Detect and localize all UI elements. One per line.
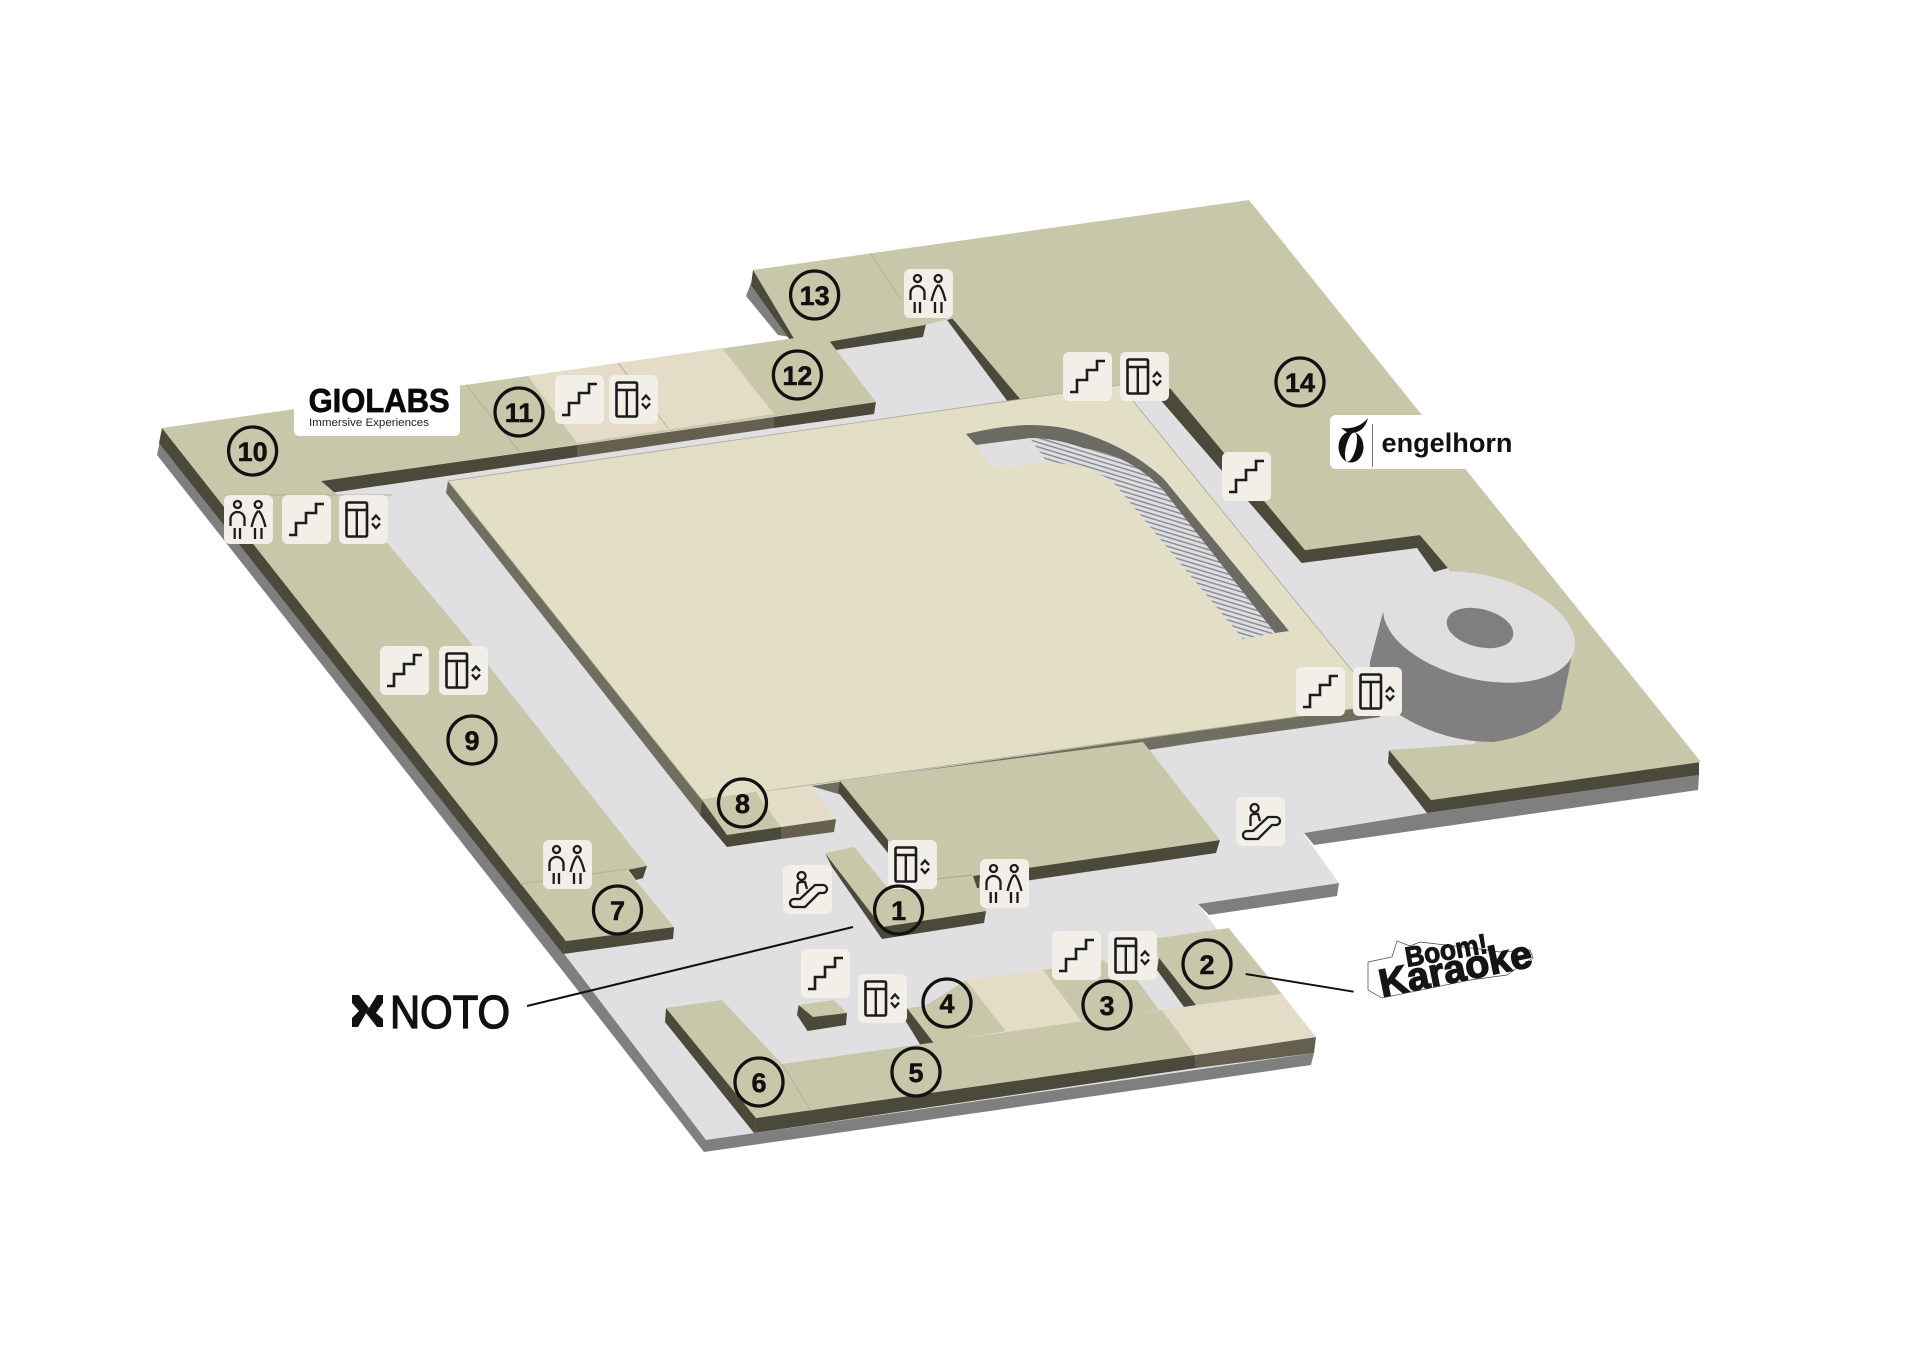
logo: Boom! Karaoke: Karaoke [1375,933,1536,1006]
icon: stairs, unit 11 [555,375,604,424]
marker 8: 8 [735,789,750,819]
marker 13: 13 [800,281,830,311]
icon: toilets, unit 13 [904,269,953,318]
icon: stairs, unit 10 [282,495,331,544]
icon: toilets, unit 1 [980,859,1029,908]
callout: XNOTO leader line [527,927,853,1006]
central atrium floor [446,385,1380,815]
numbered unit markers [229,271,1324,1106]
marker 1: 1 [891,896,906,926]
atrium opening: stairs [1030,438,1275,639]
units 5 and 6 row [665,994,1316,1133]
marker 2: 2 [1199,950,1215,980]
marker 14 [1276,358,1324,406]
marker 11: 11 [505,398,533,428]
marker 10 [229,427,277,475]
corridor floor [162,300,1600,1140]
logo: GIOLABS [294,382,460,436]
marker 4: 4 [939,989,955,1019]
marker 3 [1083,981,1131,1029]
marker 6: 6 [751,1068,767,1098]
icon: lift, unit 4 [858,974,907,1023]
icon: lift, unit 1 [888,840,937,889]
marker 4 [923,979,971,1027]
marker 1 [875,886,923,934]
icon: lift, atrium top [1120,352,1169,401]
marker 9 [448,716,496,764]
icon: stairs, service block [801,949,850,998]
icon: stairs, unit 3 [1052,931,1101,980]
icon: lift, unit 11 [609,375,658,424]
logo: Boom! Karaoke: Boom! [1403,928,1490,973]
icon: toilets, unit 7 [543,840,592,889]
facility icons [224,269,1402,1023]
icon: toilets, unit 10 [224,495,273,544]
unit 8 block [700,786,836,847]
icon: stairs, atrium top [1063,352,1112,401]
logo: engelhorn [1330,415,1520,469]
icon: stairs, atrium right [1296,667,1345,716]
building base: grey outer side walls [157,283,1699,1152]
marker 6 [735,1058,783,1106]
marker 7: 7 [610,896,625,926]
marker 3: 3 [1099,991,1115,1021]
marker 13 [791,271,839,319]
logo: GIOLABS: Immersive Experiences [309,417,430,429]
logo: GIOLABS: GIOLABS [309,382,450,419]
marker 11 [495,388,543,436]
marker 14: 14 [1285,368,1315,398]
logo: XNOTO: NOTO [390,986,510,1038]
unit 1 block [825,847,986,939]
marker 12: 12 [782,361,812,391]
cylindrical core [1370,553,1587,742]
callout: Boom Karaoke leader line [1246,974,1354,992]
icon: stairs, unit 9 [380,646,429,695]
marker 5 [892,1048,940,1096]
marker 8 [718,779,766,827]
marker 5: 5 [908,1058,924,1088]
units 3 and 4 row [905,960,1159,1046]
icon: stairs, unit 14 [1222,452,1271,501]
small service block [797,1000,847,1031]
unit 2 block [1145,928,1282,1007]
upper right retail area: units 13 and 14 [751,200,1701,813]
logo: engelhorn: engelhorn [1382,428,1512,458]
marker 9: 9 [464,726,480,756]
left and top retail wing: units 7, 9, 10, 11, 12 [159,334,876,954]
central retail block [838,742,1220,887]
atrium opening: curved wall [966,425,1289,633]
icon: escalator, left [783,865,832,914]
icon: lift, unit 3 [1108,931,1157,980]
marker 12 [773,351,821,399]
marker 10: 10 [238,437,268,467]
icon: lift, atrium right [1353,667,1402,716]
icon: lift, unit 10 [339,495,388,544]
icon: escalator, right [1236,797,1285,846]
marker 7 [594,886,642,934]
atrium opening: landing [976,439,1047,468]
icon: lift, unit 9 [439,646,488,695]
marker 2 [1183,940,1231,988]
